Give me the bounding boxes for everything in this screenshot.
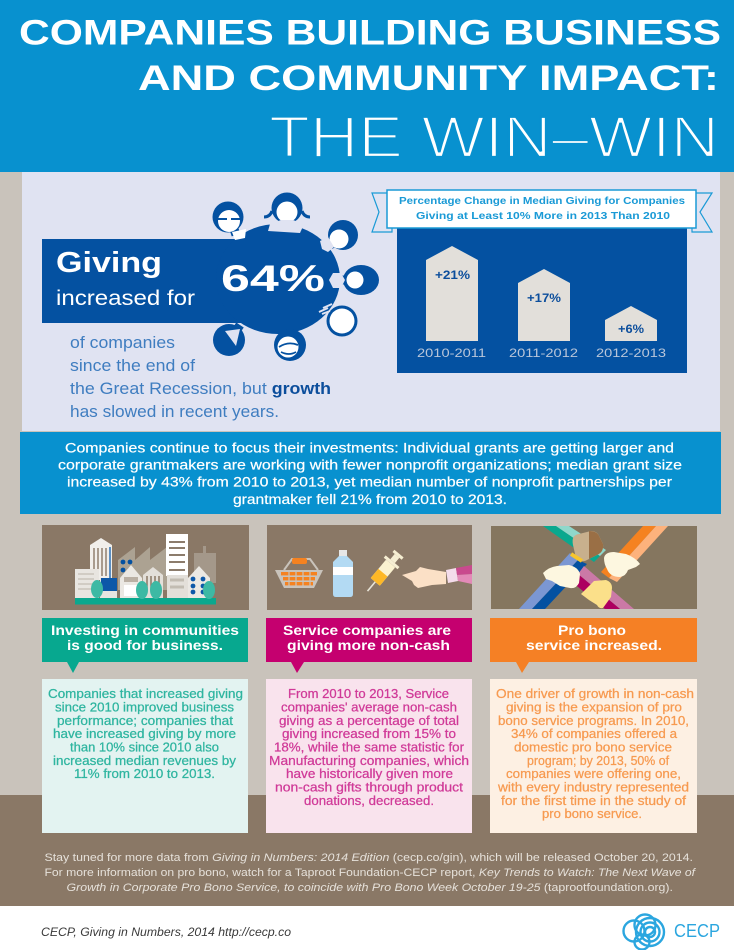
icon: city skyline	[42, 525, 249, 610]
text block: investing in communities: increased median revenues by	[53, 754, 237, 768]
panel: investing in communities	[42, 525, 249, 833]
heading: pro bono	[490, 618, 697, 673]
text block: description	[70, 334, 331, 421]
white hand	[604, 552, 640, 577]
text block: investing in communities: than 10% since 2010 also	[70, 740, 219, 754]
heading: service companies: giving more non-cash	[287, 637, 450, 653]
text block: investing in communities: performance; companies that	[57, 714, 234, 728]
heading: giving: Giving	[56, 247, 162, 279]
heading: pro bono: Pro bono	[558, 622, 626, 638]
icon: people around a table	[42, 192, 379, 361]
logo: CECP: CECP	[674, 921, 720, 941]
text block: investing in communities: Companies that increased giving	[48, 687, 243, 701]
label: increased for: increased for	[56, 287, 195, 310]
text block: service companies: giving as a percentage of total	[279, 714, 459, 728]
yellow hand	[581, 580, 612, 608]
text block: pro bono: program; by 2013, 50% of	[527, 754, 670, 768]
brown hand	[573, 531, 603, 561]
text block: pro bono: pro bono service.	[542, 807, 642, 821]
cream hand	[543, 565, 580, 588]
heading: investing in communities	[42, 618, 248, 673]
text block: description: of companies	[70, 334, 175, 352]
bar chart: percentage change in median giving	[372, 190, 712, 373]
text block: pro bono: with every industry represented	[497, 780, 689, 794]
text block: footer note: Stay tuned for more data from Giving in Numbers: 2014 Edition (cecp.co/gin), which will be released October 20, 2014.	[44, 852, 693, 864]
heading: investing in communities: Investing in communities	[51, 622, 239, 638]
heading: investing in communities: is good for business.	[67, 637, 223, 653]
text block: footer note	[44, 852, 696, 894]
logo: CECP	[624, 914, 720, 950]
title banner	[0, 0, 734, 172]
text block: pro bono: 34% of companies offered a	[511, 727, 677, 741]
text block: service companies	[266, 679, 472, 833]
text block: service companies: From 2010 to 2013, Service	[288, 687, 449, 701]
bar 2012-2013	[596, 306, 666, 360]
title banner: COMPANIES BUILDING BUSINESS	[19, 14, 721, 52]
text block: pro bono: bono service programs. In 2010,	[498, 714, 689, 728]
bar 2011-2012: +17%	[527, 293, 561, 305]
text block: service companies: 18%, while the same statistic for	[274, 740, 464, 754]
panel: investment focus band: grantmaker fell 21% from 2010 to 2013.	[233, 492, 507, 507]
panel: pro bono	[490, 526, 697, 833]
source credit: CECP, Giving in Numbers, 2014 http://cecp.co	[41, 925, 291, 939]
bar 2012-2013: +6%	[618, 324, 644, 336]
text block: footer note: For more information on pro bono, watch for a Taproot Foundation-CECP report, Key Trends to Watch: The Next Wave of	[44, 867, 696, 879]
bar 2011-2012: 2011-2012	[509, 346, 578, 360]
ribbon: chart title	[372, 190, 712, 232]
heading: service companies: Service companies are	[283, 622, 451, 638]
bar 2010-2011: +21%	[435, 270, 470, 282]
heading: service companies	[266, 618, 472, 673]
text block: service companies: have historically given more	[286, 767, 453, 781]
bar 2010-2011	[417, 246, 486, 360]
ribbon: chart title: Giving at Least 10% More in 2013 Than 2010	[416, 210, 670, 222]
text block: pro bono: domestic pro bono service	[514, 740, 672, 754]
text block: service companies: companies' average non-cash	[281, 700, 457, 714]
text block: description: the Great Recession, but growth	[70, 380, 331, 398]
bar 2011-2012	[509, 269, 578, 360]
heading: pro bono: service increased.	[526, 637, 662, 653]
text block: pro bono: companies were offering one,	[506, 767, 681, 781]
icon: four linked hands	[491, 526, 697, 609]
text block: investing in communities: since 2010 improved business	[55, 700, 234, 714]
text block: service companies: non-cash gifts through product	[275, 780, 464, 794]
text block: footer note: Growth in Corporate Pro Bono Service, to coincide with Pro Bono Week October 19-25 (taprootfoundation.org).	[66, 882, 673, 894]
panel: service companies	[266, 525, 472, 833]
bar 2012-2013: 2012-2013	[596, 346, 666, 360]
text block: investing in communities	[42, 679, 248, 833]
text block: service companies: giving increased from 15% to	[282, 727, 456, 741]
text block: investing in communities: have increased giving by more	[53, 727, 236, 741]
panel: investment focus band: Companies continue to focus their investments: Individual grants are getting larger and	[65, 440, 674, 456]
text block: description: since the end of	[70, 357, 195, 375]
bar 2010-2011: 2010-2011	[417, 346, 486, 360]
title banner: THE WIN–WIN	[269, 105, 719, 170]
big number: 64%	[221, 258, 325, 299]
panel: giving statistic	[22, 172, 720, 431]
text block: investing in communities: 11% from 2010 to 2013.	[74, 767, 215, 781]
text block: pro bono: for the first time in the study of	[501, 794, 687, 808]
title banner: AND COMMUNITY IMPACT:	[138, 59, 719, 98]
icon: basket, bottle, syringe and hand	[267, 525, 472, 610]
text block: service companies: donations, decreased.	[304, 794, 434, 808]
text block: service companies: Manufacturing companies, which	[269, 754, 469, 768]
text block: pro bono: giving is the expansion of pro	[506, 700, 682, 714]
panel: investment focus band: corporate grantmakers are working with fewer nonprofit organizations; median grant size	[58, 458, 682, 472]
text block: pro bono: One driver of growth in non-cash	[496, 687, 694, 701]
panel: investment focus band	[20, 432, 721, 514]
ribbon: chart title: Percentage Change in Median Giving for Companies	[399, 195, 685, 207]
text block: description: has slowed in recent years.	[70, 403, 279, 421]
panel: investment focus band: increased by 43% from 2010 to 2013, yet median number of nonprofit partnerships per	[67, 474, 673, 490]
text block: pro bono	[490, 679, 697, 833]
